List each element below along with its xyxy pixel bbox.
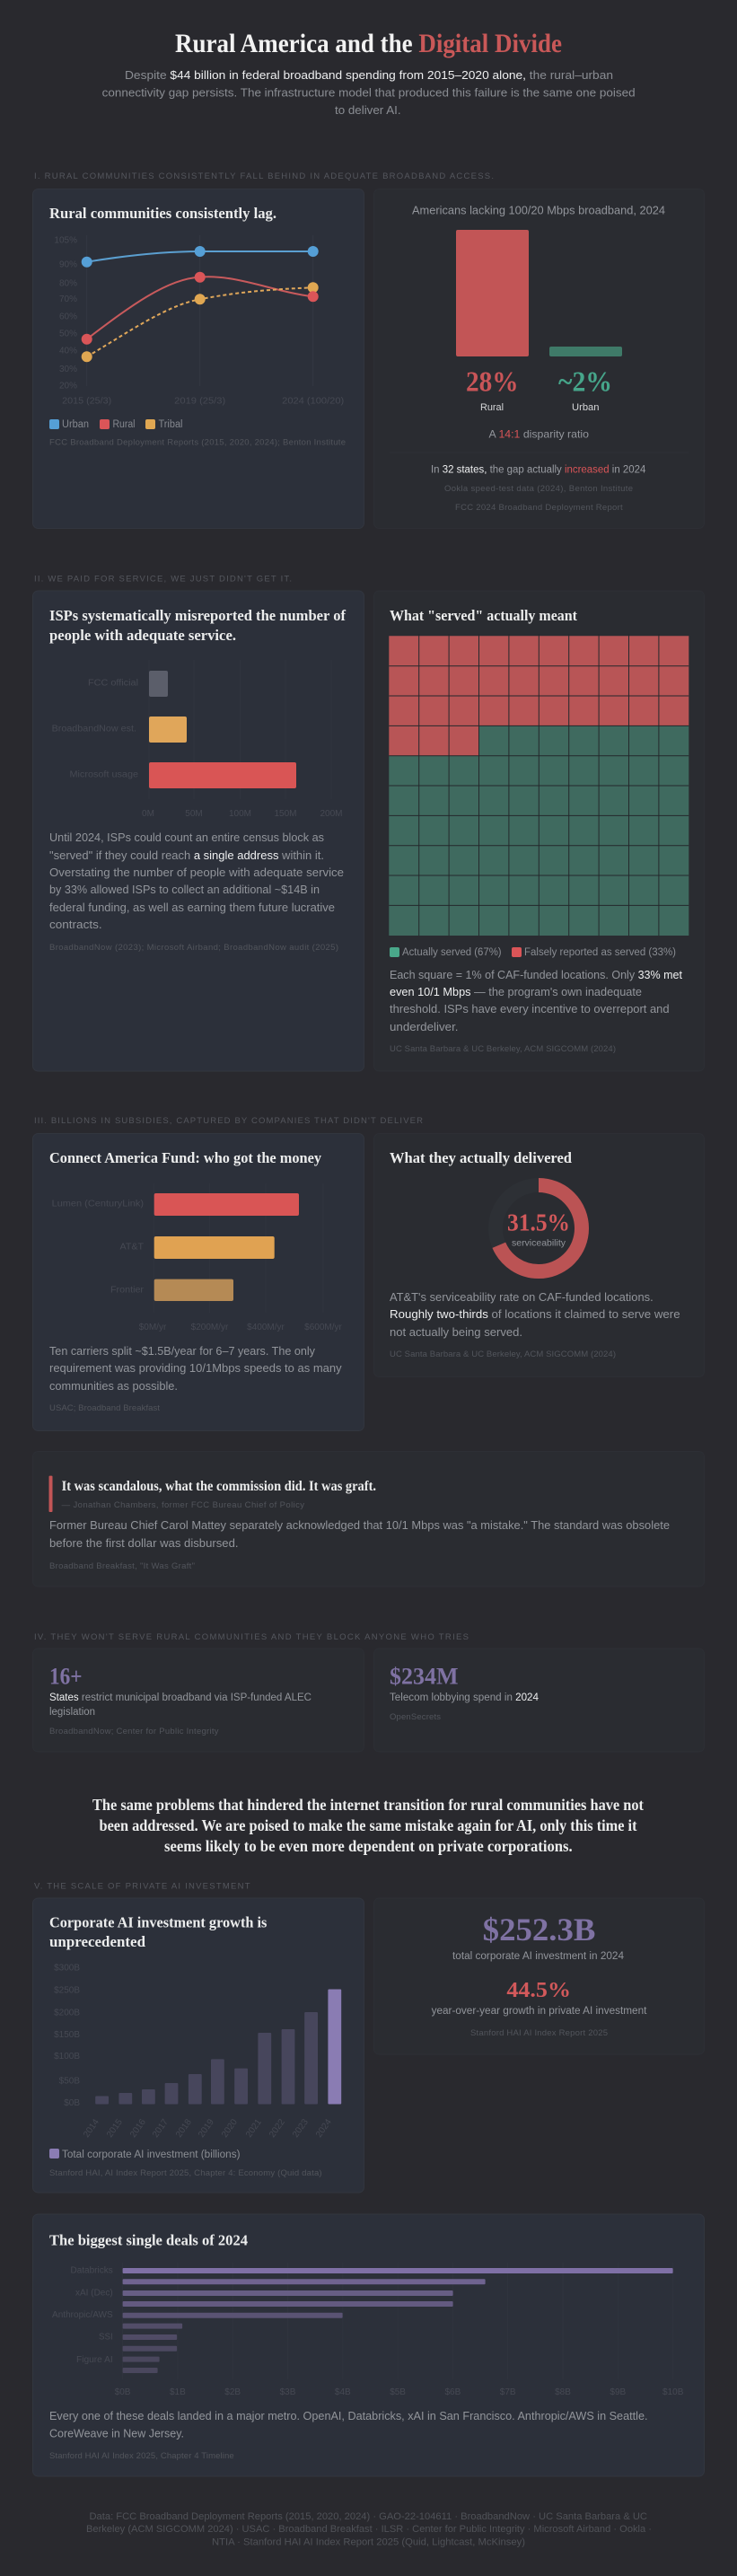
line chart: 2024 (100/20) — [282, 397, 344, 406]
source: UC Santa Barbara & UC Berkeley, ACM SIGCOMM (2024) — [390, 1350, 616, 1359]
subtitle: to deliver AI. — [335, 103, 401, 117]
donut chart: 31.5% — [507, 1209, 570, 1235]
bar chart: AI investment: $150B — [54, 2030, 80, 2040]
statement: The same problems that hindered the internet transition for rural communities have not — [92, 1796, 644, 1814]
section label: I: I. RURAL COMMUNITIES CONSISTENTLY FALL BEHIND IN ADEQUATE BROADBAND ACCESS. — [34, 171, 494, 181]
body text: requirement was providing 10/1Mbps speeds to as many — [49, 1362, 342, 1375]
body text: Roughly two-thirds of locations it claimed to serve were — [390, 1308, 680, 1321]
bar chart: unserved estimates: 100M — [229, 809, 251, 819]
bar chart: deals: $8B — [555, 2387, 571, 2397]
donut chart — [496, 1185, 582, 1271]
bar chart: AI investment — [54, 1963, 341, 2140]
body text — [390, 969, 683, 1033]
stat: total investment — [452, 1912, 625, 1962]
heading: What "served" actually meant — [390, 607, 577, 624]
legend: Urban — [62, 419, 89, 430]
bar chart: CAF money: Lumen (CenturyLink) — [52, 1200, 144, 1209]
body text: communities as possible. — [49, 1380, 178, 1393]
bar chart: unserved estimates: Microsoft usage — [70, 770, 138, 779]
statement: been addressed. We are poised to make the same mistake again for AI, only this time it — [99, 1816, 637, 1834]
panel: quote — [32, 1451, 704, 1587]
bar chart: AI investment: 2021 — [244, 2117, 264, 2140]
bar chart: AI investment: 2019 — [197, 2117, 216, 2140]
line chart: 2015 (25/3) — [62, 397, 111, 406]
gap note: In 32 states, the gap actually increased in 2024 — [431, 465, 646, 476]
bar chart: AI investment: $200B — [54, 2008, 80, 2018]
panel: biggest deals — [32, 2214, 704, 2476]
line chart: 70% — [59, 295, 77, 304]
subtitle — [102, 68, 636, 117]
body text: before the first dollar was disbursed. — [49, 1537, 239, 1550]
panel: rural communities line chart — [32, 189, 364, 528]
body text: not actually being served. — [390, 1326, 522, 1339]
line chart: 80% — [59, 278, 77, 289]
body text: Each square = 1% of CAF-funded locations. Only 33% met — [390, 969, 683, 981]
bar chart: unserved estimates: 200M — [320, 809, 343, 819]
body text: legislation — [49, 1707, 95, 1718]
disparity ratio: A 14:1 disparity ratio — [488, 427, 589, 440]
bar chart: AI investment: 2015 — [105, 2117, 125, 2140]
panel: what they delivered — [373, 1133, 704, 1377]
bar chart: unserved estimates: 0M — [142, 809, 154, 819]
legend: Total corporate AI investment (billions) — [62, 2150, 241, 2160]
bar chart: deals: SSI — [99, 2333, 113, 2342]
body text: Until 2024, ISPs could count an entire census block as — [49, 831, 324, 844]
bar chart: deals: $7B — [500, 2387, 516, 2397]
sources: FCC 2024 Broadband Deployment Report — [455, 503, 623, 513]
sources: Ookla speed-test data (2024), Benton Institute — [444, 484, 633, 494]
line chart: 60% — [59, 312, 77, 321]
bar chart: AI investment: $250B — [54, 1986, 80, 1995]
source: Stanford HAI AI Index Report 2025 — [470, 2028, 608, 2038]
stat: yoy growth: 44.5% — [506, 1979, 571, 2002]
stat: 16+ — [49, 1663, 83, 1690]
source: UC Santa Barbara & UC Berkeley, ACM SIGCOMM (2024) — [390, 1044, 616, 1054]
source: BroadbandNow; Center for Public Integrity — [49, 1727, 219, 1736]
bar chart: deals: $1B — [170, 2387, 186, 2397]
bar chart: deals: xAI (Dec) — [75, 2288, 113, 2299]
bar chart: CAF money: $600M/yr — [304, 1323, 343, 1332]
bar chart: AI investment: 2014 — [82, 2117, 101, 2140]
heading — [49, 607, 346, 644]
bar chart: deals: Figure AI — [76, 2355, 113, 2365]
heading: Americans lacking 100/20 Mbps broadband, 2024 — [412, 205, 665, 217]
heading: The biggest single deals of 2024 — [49, 2232, 248, 2249]
body text: States restrict municipal broadband via ISP-funded ALEC — [49, 1692, 311, 1703]
body text: threshold. ISPs have every incentive to overreport and — [390, 1003, 670, 1015]
heading: Corporate AI investment growth is — [49, 1914, 268, 1930]
heading: Connect America Fund: who got the money — [49, 1149, 321, 1166]
body text: Ten carriers split ~$1.5B/year for 6–7 years. The only — [49, 1345, 316, 1358]
stat: $234M — [390, 1663, 458, 1690]
panel: lobbying — [373, 1648, 704, 1752]
bar chart: deals: $6B — [445, 2387, 461, 2397]
body text: underdeliver. — [390, 1021, 458, 1033]
bar chart: AI investment: 2016 — [128, 2117, 148, 2140]
body text — [390, 1291, 680, 1339]
bar chart: unserved estimates: 50M — [185, 809, 203, 819]
bar chart: CAF money — [52, 1183, 343, 1332]
body text: Every one of these deals landed in a major metro. OpenAI, Databricks, xAI in San Francisco. Anthropic/AWS in Seattle. — [49, 2410, 648, 2422]
bar chart: deals — [52, 2263, 684, 2397]
statement: seems likely to be even more dependent on private corporations. — [164, 1837, 573, 1855]
bar chart: CAF money: $200M/yr — [191, 1323, 229, 1332]
line chart — [54, 235, 344, 406]
bar chart: unserved estimates — [52, 660, 343, 819]
panel: AI investment growth — [32, 1898, 364, 2193]
bar chart: CAF money: $400M/yr — [247, 1323, 285, 1332]
bar chart: deals: $4B — [335, 2387, 351, 2397]
heading: What they actually delivered — [390, 1149, 573, 1166]
heading: Rural communities consistently lag. — [49, 205, 276, 222]
legend: Rural — [113, 419, 135, 430]
bar chart: unserved estimates: FCC official — [88, 679, 138, 688]
body text: contracts. — [49, 919, 102, 931]
source: BroadbandNow (2023); Microsoft Airband; BroadbandNow audit (2025) — [49, 943, 338, 953]
bar chart: deals: $0B — [115, 2387, 131, 2397]
waffle legend — [390, 947, 676, 958]
panel: misreporting bars — [32, 591, 364, 1071]
footer: Data: FCC Broadband Deployment Reports (2015, 2020, 2024) · GAO-22-104611 · BroadbandNow · UC Santa Barbara & UC — [90, 2511, 647, 2522]
bar chart: AI investment: $50B — [59, 2076, 80, 2087]
bar chart: deals: $2B — [224, 2387, 241, 2397]
section label: V: V. THE SCALE OF PRIVATE AI INVESTMENT — [34, 1882, 250, 1891]
statement — [92, 1796, 644, 1855]
stat: 28% rural — [466, 365, 519, 413]
body text: Overstating the number of people with adequate service — [49, 866, 344, 879]
footer: NTIA · Stanford HAI AI Index Report 2025 (Quid, Lightcast, McKinsey) — [212, 2537, 525, 2548]
quote: It was scandalous, what the commission did. It was graft. — [62, 1479, 376, 1494]
stat: 2% urban: Urban — [572, 402, 600, 413]
bar: urban — [549, 347, 622, 356]
stat: 28% rural: Rural — [480, 402, 504, 413]
source: FCC Broadband Deployment Reports (2015, 2020, 2024); Benton Institute — [49, 438, 346, 447]
title: Rural America and the Digital Divide — [175, 29, 562, 58]
attribution: — Jonathan Chambers, former FCC Bureau Chief of Policy — [62, 1500, 304, 1510]
bar chart: CAF money: AT&T — [120, 1243, 144, 1252]
footer: Berkeley (ACM SIGCOMM 2024) · USAC · Broadband Breakfast · ILSR · Center for Public Integrity · Microsoft Airband · Ookla · — [86, 2524, 652, 2535]
stat: 28% rural: 28% — [466, 365, 519, 397]
body text: even 10/1 Mbps — the program's own inadequate — [390, 986, 642, 998]
sources — [444, 484, 633, 513]
section label: IV: IV. THEY WON'T SERVE RURAL COMMUNITIES AND THEY BLOCK ANYONE WHO TRIES — [34, 1632, 469, 1642]
bar chart: deals: $9B — [610, 2387, 627, 2397]
body text — [49, 1519, 670, 1550]
donut chart: serviceability — [512, 1237, 566, 1248]
bar chart: AI investment: $100B — [54, 2052, 80, 2062]
body text: Former Bureau Chief Carol Mattey separately acknowledged that 10/1 Mbps was "a mistake." The standard was obsolete — [49, 1519, 670, 1532]
line chart: 105% — [54, 235, 77, 246]
source: OpenSecrets — [390, 1712, 441, 1722]
legend: Tribal — [158, 419, 183, 430]
bar chart: CAF money: $0M/yr — [139, 1323, 167, 1332]
heading: people with adequate service. — [49, 627, 236, 644]
bar chart: AI investment: 2017 — [151, 2117, 171, 2140]
panel: investment stats — [373, 1898, 704, 2054]
heading: unprecedented — [49, 1933, 146, 1950]
bar chart: AI investment: 2023 — [291, 2117, 311, 2140]
bar chart: AI investment: 2020 — [220, 2117, 240, 2140]
legend — [49, 419, 183, 430]
subtitle: Despite $44 billion in federal broadband spending from 2015–2020 alone, the rural–urban — [125, 68, 613, 82]
bar chart: AI investment: 2022 — [268, 2117, 287, 2140]
source: Stanford HAI AI Index 2025, Chapter 4 Timeline — [49, 2451, 234, 2461]
line chart: 90% — [59, 260, 77, 269]
bar chart: deals: $10B — [662, 2387, 684, 2397]
bar: rural — [456, 230, 529, 356]
bar chart: unserved estimates: 150M — [274, 809, 297, 819]
panel: states restrict — [32, 1648, 364, 1752]
stat: yoy growth — [432, 1979, 647, 2017]
section label: II: II. WE PAID FOR SERVICE, WE JUST DIDN'T GET IT. — [34, 575, 292, 584]
panel: waffle chart — [373, 591, 704, 1071]
bar chart: AI investment: 2024 — [314, 2117, 334, 2140]
heading: ISPs systematically misreported the number of — [49, 607, 346, 624]
bar chart: deals: $5B — [390, 2387, 406, 2397]
heading — [49, 1914, 268, 1950]
body text: federal funding, as well as earning them future lucrative — [49, 901, 335, 914]
body text — [49, 831, 344, 931]
stat: yoy growth: year-over-year growth in private AI investment — [432, 2006, 647, 2017]
body text: by 33% allowed ISPs to collect an additional ~$14B in — [49, 884, 320, 896]
stat: total investment: $252.3B — [483, 1912, 595, 1947]
bar chart: AI investment: $300B — [54, 1963, 80, 1974]
body text — [49, 1345, 342, 1393]
bar chart: deals: Anthropic/AWS — [52, 2310, 113, 2320]
waffle legend: Falsely reported as served (33%) — [524, 947, 676, 958]
stat: 2% urban: ~2% — [558, 365, 612, 397]
section label: III: III. BILLIONS IN SUBSIDIES, CAPTURED BY COMPANIES THAT DIDN'T DELIVER — [34, 1116, 423, 1126]
panel: disparity bars — [373, 189, 704, 528]
bar chart: unserved estimates: BroadbandNow est. — [52, 724, 136, 734]
body text — [49, 1692, 311, 1718]
subtitle: connectivity gap persists. The infrastructure model that produced this failure is the same one poised — [102, 86, 636, 99]
bar chart: AI investment: 2018 — [174, 2117, 194, 2140]
stat: total investment: total corporate AI investment in 2024 — [452, 1951, 625, 1962]
line chart: 30% — [59, 365, 77, 374]
bar chart: CAF money: Frontier — [110, 1286, 145, 1295]
body text: Telecom lobbying spend in 2024 — [390, 1692, 540, 1703]
footer — [86, 2511, 652, 2548]
source: Broadband Breakfast, "It Was Graft" — [49, 1561, 195, 1571]
body text — [49, 2410, 648, 2440]
waffle legend: Actually served (67%) — [402, 947, 502, 958]
bar chart: deals: $3B — [280, 2387, 296, 2397]
body text: "served" if they could reach a single address within it. — [49, 849, 324, 862]
waffle chart — [389, 634, 689, 936]
bar chart: AI investment: $0B — [64, 2098, 80, 2108]
source: USAC; Broadband Breakfast — [49, 1403, 160, 1413]
quote bar — [48, 1476, 52, 1512]
body text: CoreWeave in New Jersey. — [49, 2428, 184, 2440]
body text: AT&T's serviceability rate on CAF-funded locations. — [390, 1291, 654, 1304]
stat: 2% urban — [558, 365, 612, 413]
line chart: 50% — [59, 329, 77, 339]
source: Stanford HAI, AI Index Report 2025, Chapter 4: Economy (Quid data) — [49, 2168, 322, 2178]
line chart: 2019 (25/3) — [174, 397, 225, 406]
line chart: 40% — [59, 347, 77, 356]
panel: connect america fund — [32, 1133, 364, 1431]
bar chart: deals: Databricks — [70, 2266, 113, 2275]
line chart: 20% — [59, 381, 77, 391]
